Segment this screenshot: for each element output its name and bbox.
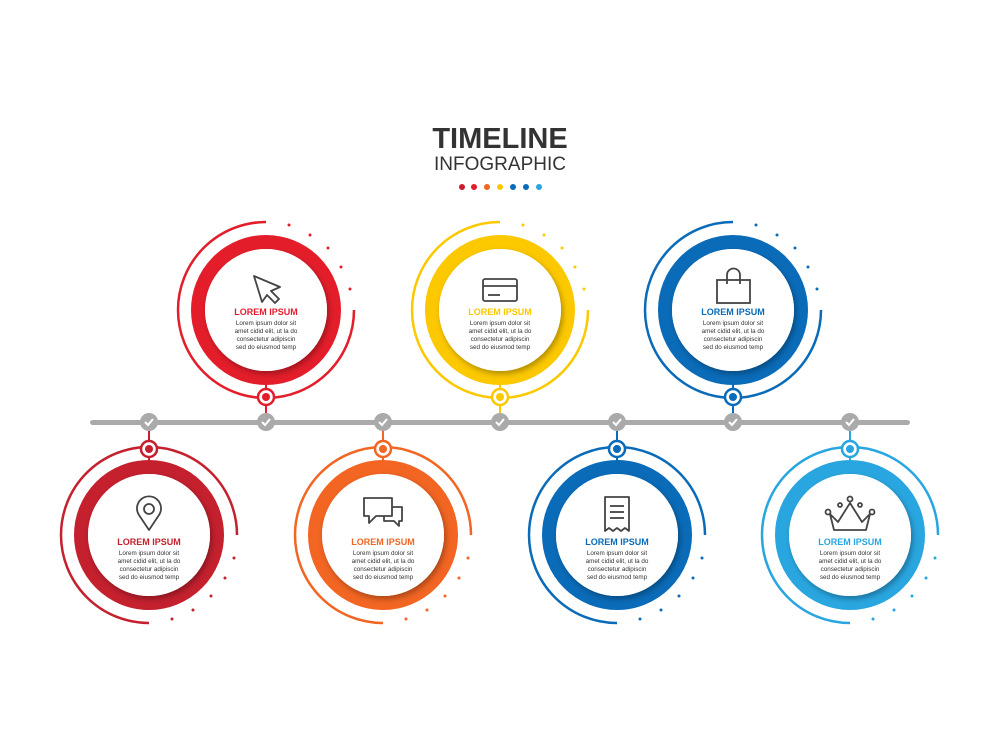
- step 3: top yellow: consectetur adipiscin: [471, 336, 530, 343]
- step 6: bottom blue: LOREM IPSUM: [585, 537, 649, 547]
- step 5: top blue: Lorem ipsum dolor sit: [703, 320, 763, 327]
- step 4: bottom orange: [295, 431, 471, 623]
- icon: crown: [826, 496, 874, 530]
- step 7: bottom light blue: consectetur adipiscin: [821, 566, 880, 573]
- step 5: top blue: consectetur adipiscin: [704, 336, 763, 343]
- step 2: bottom dark red: LOREM IPSUM: [117, 537, 181, 547]
- step 5: top blue: amet cidid elit, ut la do: [702, 328, 765, 335]
- icon: card: [483, 279, 517, 301]
- step 4: bottom orange: amet cidid elit, ut la do: [352, 558, 415, 565]
- timeline line: [90, 413, 910, 431]
- step 4: bottom orange: Lorem ipsum dolor sit: [353, 550, 413, 557]
- title: [432, 123, 568, 175]
- step 1: top red: LOREM IPSUM: [234, 307, 298, 317]
- step 4: bottom orange: LOREM IPSUM: [351, 537, 415, 547]
- step 7: bottom light blue: LOREM IPSUM: [818, 537, 882, 547]
- step 5: top blue: sed do eiusmod temp: [703, 344, 764, 351]
- icon: pin: [137, 496, 161, 530]
- step 1: top red: consectetur adipiscin: [237, 336, 296, 343]
- step 3: top yellow: Lorem ipsum dolor sit: [470, 320, 530, 327]
- step 1: top red: [178, 222, 354, 413]
- color dots: [459, 184, 542, 190]
- step 3: top yellow: sed do eiusmod temp: [470, 344, 531, 351]
- step 1: top red: sed do eiusmod temp: [236, 344, 297, 351]
- step 2: bottom dark red: amet cidid elit, ut la do: [118, 558, 181, 565]
- step 2: bottom dark red: Lorem ipsum dolor sit: [119, 550, 179, 557]
- step 4: bottom orange: sed do eiusmod temp: [353, 574, 414, 581]
- step 2: bottom dark red: [61, 431, 237, 623]
- step 1: top red: amet cidid elit, ut la do: [235, 328, 298, 335]
- step 3: top yellow: [412, 222, 588, 413]
- step 3: top yellow: amet cidid elit, ut la do: [469, 328, 532, 335]
- icon: bag: [717, 268, 750, 303]
- step 3: top yellow: LOREM IPSUM: [468, 307, 532, 317]
- step 1: top red: Lorem ipsum dolor sit: [236, 320, 296, 327]
- step 7: bottom light blue: amet cidid elit, ut la do: [819, 558, 882, 565]
- step 6: bottom blue: amet cidid elit, ut la do: [586, 558, 649, 565]
- icon: receipt: [605, 497, 629, 531]
- step 5: top blue: LOREM IPSUM: [701, 307, 765, 317]
- title: TIMELINE: [432, 123, 568, 155]
- step 6: bottom blue: consectetur adipiscin: [588, 566, 647, 573]
- step 6: bottom blue: sed do eiusmod temp: [587, 574, 648, 581]
- step 7: bottom light blue: Lorem ipsum dolor sit: [820, 550, 880, 557]
- step 4: bottom orange: consectetur adipiscin: [354, 566, 413, 573]
- step 6: bottom blue: Lorem ipsum dolor sit: [587, 550, 647, 557]
- step 2: bottom dark red: sed do eiusmod temp: [119, 574, 180, 581]
- title: INFOGRAPHIC: [434, 154, 566, 175]
- step 5: top blue: [645, 222, 821, 413]
- step 7: bottom light blue: [762, 431, 938, 623]
- step 6: bottom blue: [529, 431, 705, 623]
- step 7: bottom light blue: sed do eiusmod temp: [820, 574, 881, 581]
- step 2: bottom dark red: consectetur adipiscin: [120, 566, 179, 573]
- icon: cursor: [254, 276, 280, 303]
- icon: chat: [364, 498, 402, 526]
